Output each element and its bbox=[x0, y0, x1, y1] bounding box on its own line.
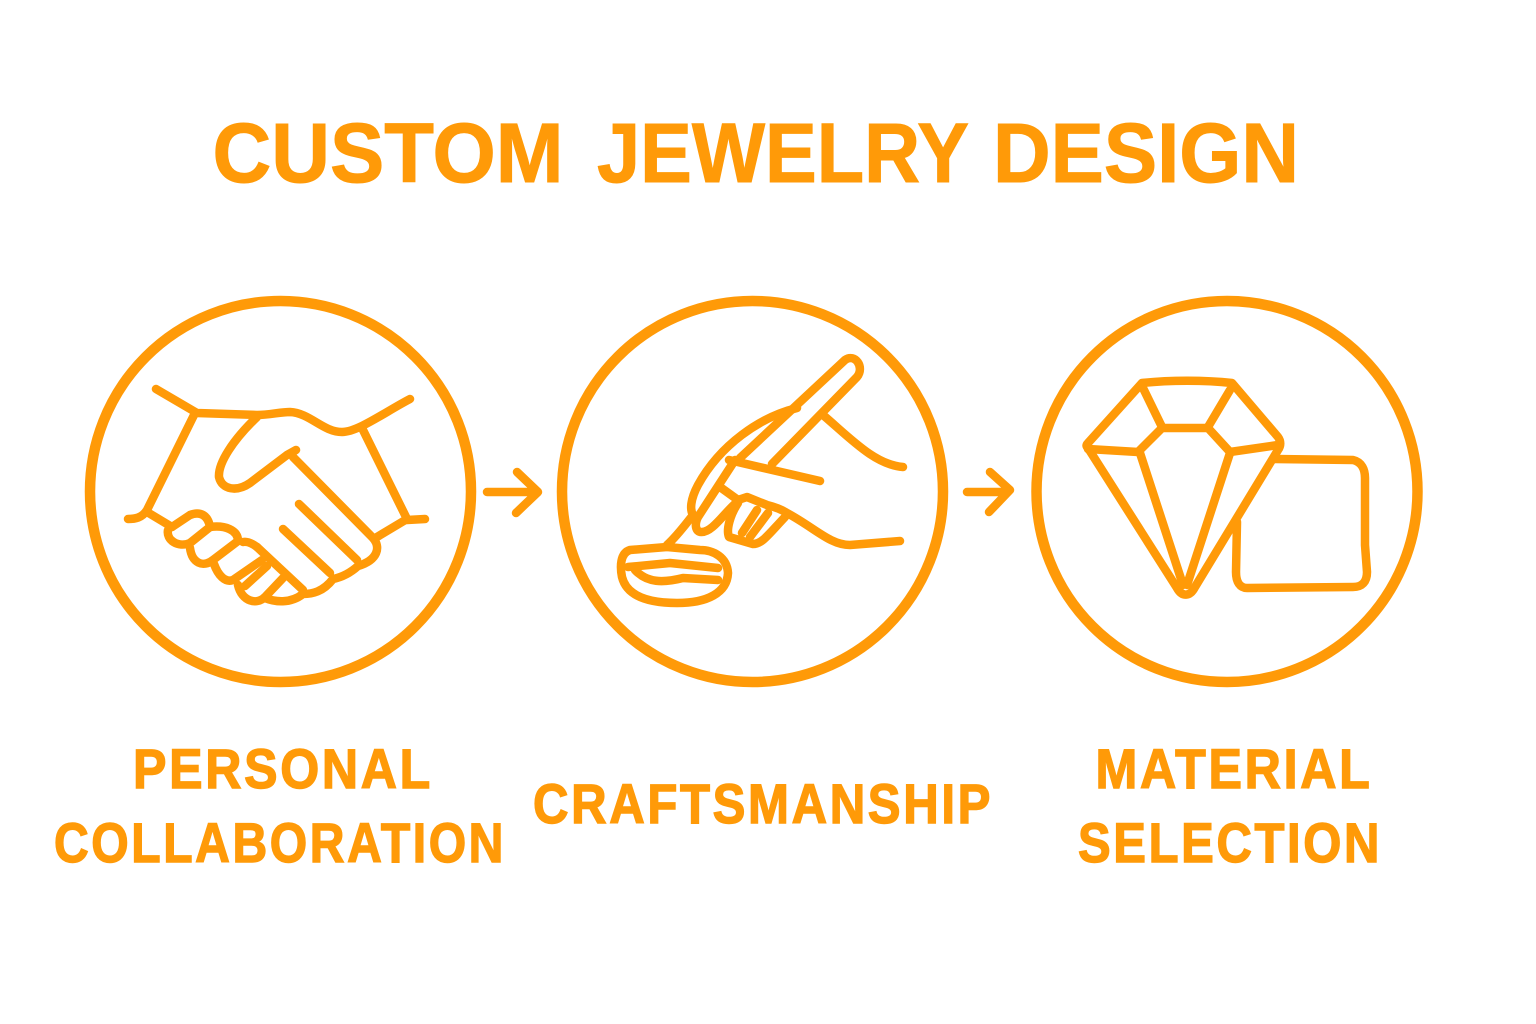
title: CUSTOM bbox=[212, 106, 564, 200]
label: material selection: MATERIAL bbox=[1096, 737, 1372, 800]
label: personal collaboration: PERSONAL bbox=[133, 737, 433, 800]
icon: circle 2 bbox=[562, 301, 943, 682]
panel: personal collaboration bbox=[90, 301, 471, 682]
title bbox=[212, 106, 1299, 200]
icon: circle 1 bbox=[90, 301, 471, 682]
icon: diamond and square bbox=[1086, 381, 1367, 595]
arrow 1 bbox=[487, 472, 538, 513]
icon: handshake bbox=[128, 389, 425, 601]
panel: material selection bbox=[1036, 301, 1418, 682]
label: material selection: SELECTION bbox=[1078, 811, 1382, 874]
label: personal collaboration: COLLABORATION bbox=[54, 811, 506, 874]
label: craftsmanship: CRAFTSMANSHIP bbox=[533, 772, 993, 835]
label: material selection bbox=[1078, 737, 1382, 874]
icon: circle 3 bbox=[1036, 301, 1418, 682]
icon: hand with tool and ring bbox=[621, 358, 903, 603]
label: personal collaboration bbox=[54, 737, 506, 874]
title: JEWELRY bbox=[597, 106, 969, 200]
arrow 2 bbox=[967, 472, 1010, 512]
panel: craftsmanship bbox=[562, 301, 943, 682]
title: DESIGN bbox=[993, 106, 1299, 200]
